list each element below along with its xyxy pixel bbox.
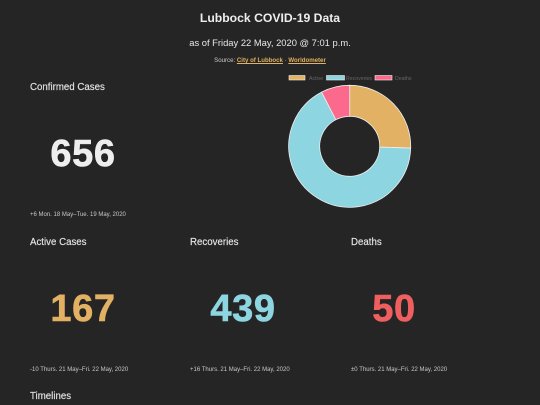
note: recoveries change: +16 Thurs. 21 May–Fri. 22 May, 2020	[190, 367, 290, 373]
number: confirmed cases: 656	[50, 132, 116, 174]
note: active change: -10 Thurs. 21 May–Fri. 22 May, 2020	[30, 367, 128, 373]
subtitle: date: as of Friday 22 May, 2020 @ 7:01 p.m.	[189, 36, 351, 48]
number: deaths: 50	[372, 288, 416, 330]
legend	[289, 76, 412, 82]
heading: active cases: Active Cases	[30, 236, 87, 248]
donut chart with legend	[288, 75, 412, 208]
legend: Active	[309, 76, 323, 82]
title: Lubbock COVID-19 Data	[200, 11, 340, 25]
heading: timelines: Timelines	[30, 391, 71, 402]
donut segments	[289, 85, 411, 207]
legend: Deaths	[395, 76, 412, 82]
note: confirmed change: +6 Mon. 18 May–Tue. 19 May, 2020	[30, 212, 126, 218]
number: recoveries: 439	[210, 288, 276, 330]
panel: active cases	[30, 236, 128, 373]
source line: Source: City of Lubbock · Worldometer	[214, 57, 326, 64]
note: deaths change: ±0 Thurs. 21 May–Fri. 22 May, 2020	[351, 367, 447, 373]
heading: confirmed cases: Confirmed Cases	[30, 82, 105, 92]
panel: deaths	[351, 236, 447, 373]
heading: recoveries: Recoveries	[190, 236, 238, 248]
number: active cases: 167	[50, 288, 116, 330]
panel: confirmed cases	[30, 82, 126, 218]
legend: Recoveries	[346, 76, 372, 82]
panel: recoveries	[190, 236, 290, 373]
heading: deaths: Deaths	[351, 236, 382, 248]
